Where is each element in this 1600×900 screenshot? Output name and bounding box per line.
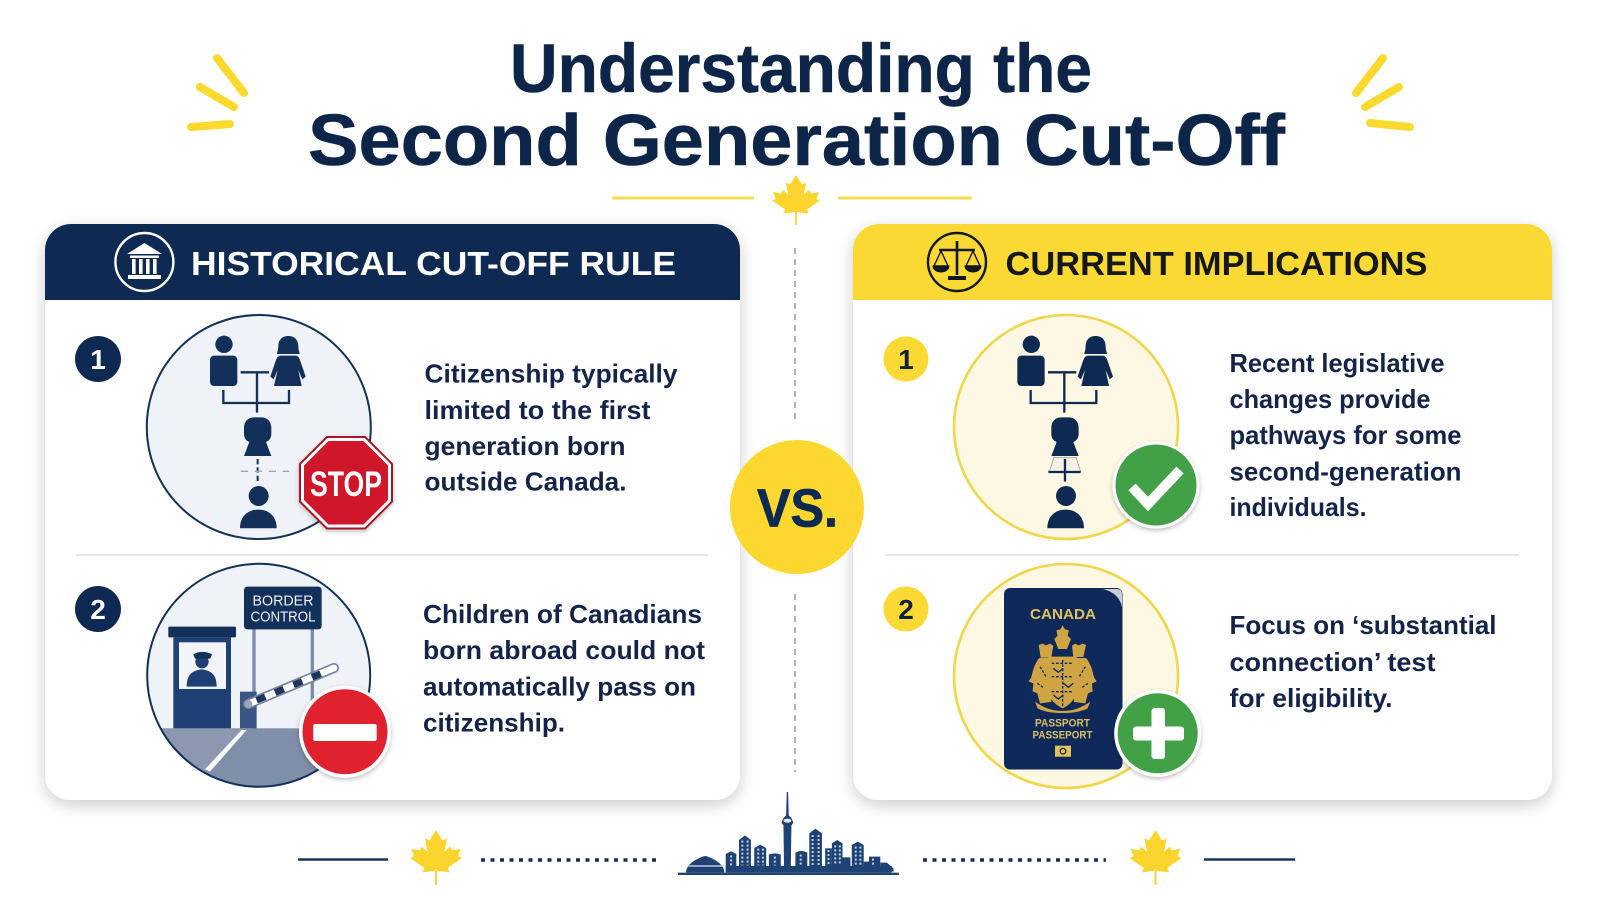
footer decoration [298, 792, 1295, 885]
text block: right item 2: for eligibility. [1230, 683, 1392, 713]
text block: left item 1: limited to the first [424, 395, 651, 425]
text block: right item 1: pathways for some [1230, 420, 1462, 450]
passport book: PASSEPORT [1032, 730, 1093, 742]
title: Understanding the [510, 30, 1092, 107]
text block: right item 1: individuals. [1230, 492, 1366, 522]
text block: right item 2: connection’ test [1230, 647, 1436, 677]
sign text [250, 592, 316, 626]
decorative sparks right [1356, 58, 1410, 127]
panel header: current [853, 224, 1552, 300]
decorative sparks left [191, 58, 244, 127]
centre dashed divider [794, 248, 796, 772]
text block: right item 2 [1230, 610, 1496, 713]
title: Second Generation Cut-Off [308, 101, 1286, 181]
panel: historical cut-off rule [45, 224, 740, 800]
border scene [143, 587, 377, 792]
badge 2 right: 2 [898, 594, 914, 625]
badge 1 right [884, 336, 928, 382]
title divider with maple leaf [612, 175, 972, 225]
VS badge [730, 440, 864, 574]
family tree figures [1017, 336, 1113, 528]
passport book [1004, 588, 1122, 770]
icon: Toronto skyline [678, 792, 899, 875]
text block: left item 1: Citizenship typically [424, 358, 678, 388]
text block: right item 1: changes provide [1230, 384, 1430, 414]
coat of arms [1029, 625, 1097, 713]
text block: left item 1: generation born [424, 431, 626, 461]
text block: right item 1: second-generation [1230, 456, 1462, 486]
icon: scales of justice [928, 233, 986, 291]
icon: green check [1112, 442, 1200, 528]
sign text: CONTROL [250, 608, 316, 626]
sign text: BORDER [252, 592, 314, 610]
text block: left item 2: citizenship. [423, 708, 565, 738]
header text: current: CURRENT IMPLICATIONS [1006, 245, 1428, 282]
icon: passport [954, 564, 1201, 788]
badge 1 right: 1 [898, 344, 914, 375]
header text: historical: HISTORICAL CUT-OFF RULE [191, 245, 676, 282]
text block: left item 2 [423, 599, 705, 738]
panel header: historical [45, 224, 740, 300]
icon: no entry sign [299, 686, 391, 778]
text block: right item 1: Recent legislative [1230, 348, 1444, 378]
badge 2 left [75, 586, 121, 632]
icon: stop sign [299, 436, 393, 530]
title [308, 30, 1286, 181]
icon: maple leaf left [410, 830, 462, 885]
icon: border control [143, 564, 391, 792]
text block: left item 2: born abroad could not [423, 635, 705, 665]
text block: left item 2: Children of Canadians [423, 599, 702, 629]
icon: stop sign: STOP [310, 465, 382, 504]
badge 1 left: 1 [90, 344, 106, 375]
badge 1 left [75, 336, 121, 382]
VS badge: VS. [757, 479, 838, 539]
panel: current implications [853, 224, 1552, 800]
text block: left item 1 [424, 358, 678, 496]
icon: family tree stop [147, 315, 393, 539]
badge 2 left: 2 [90, 594, 106, 625]
officer [187, 652, 217, 687]
icon: government building [115, 233, 173, 291]
text block: left item 1: outside Canada. [424, 466, 626, 496]
badge 2 right [884, 586, 928, 632]
text block: left item 2: automatically pass on [423, 672, 696, 702]
icon: family tree approved [954, 315, 1200, 539]
text block: right item 1 [1230, 348, 1462, 522]
passport book: PASSPORT [1035, 718, 1090, 730]
family tree figures [210, 336, 306, 528]
text block: right item 2: Focus on ‘substantial [1230, 610, 1496, 640]
icon: maple leaf right [1130, 830, 1182, 885]
icon: green plus [1114, 690, 1201, 777]
passport book: CANADA [1030, 606, 1096, 623]
